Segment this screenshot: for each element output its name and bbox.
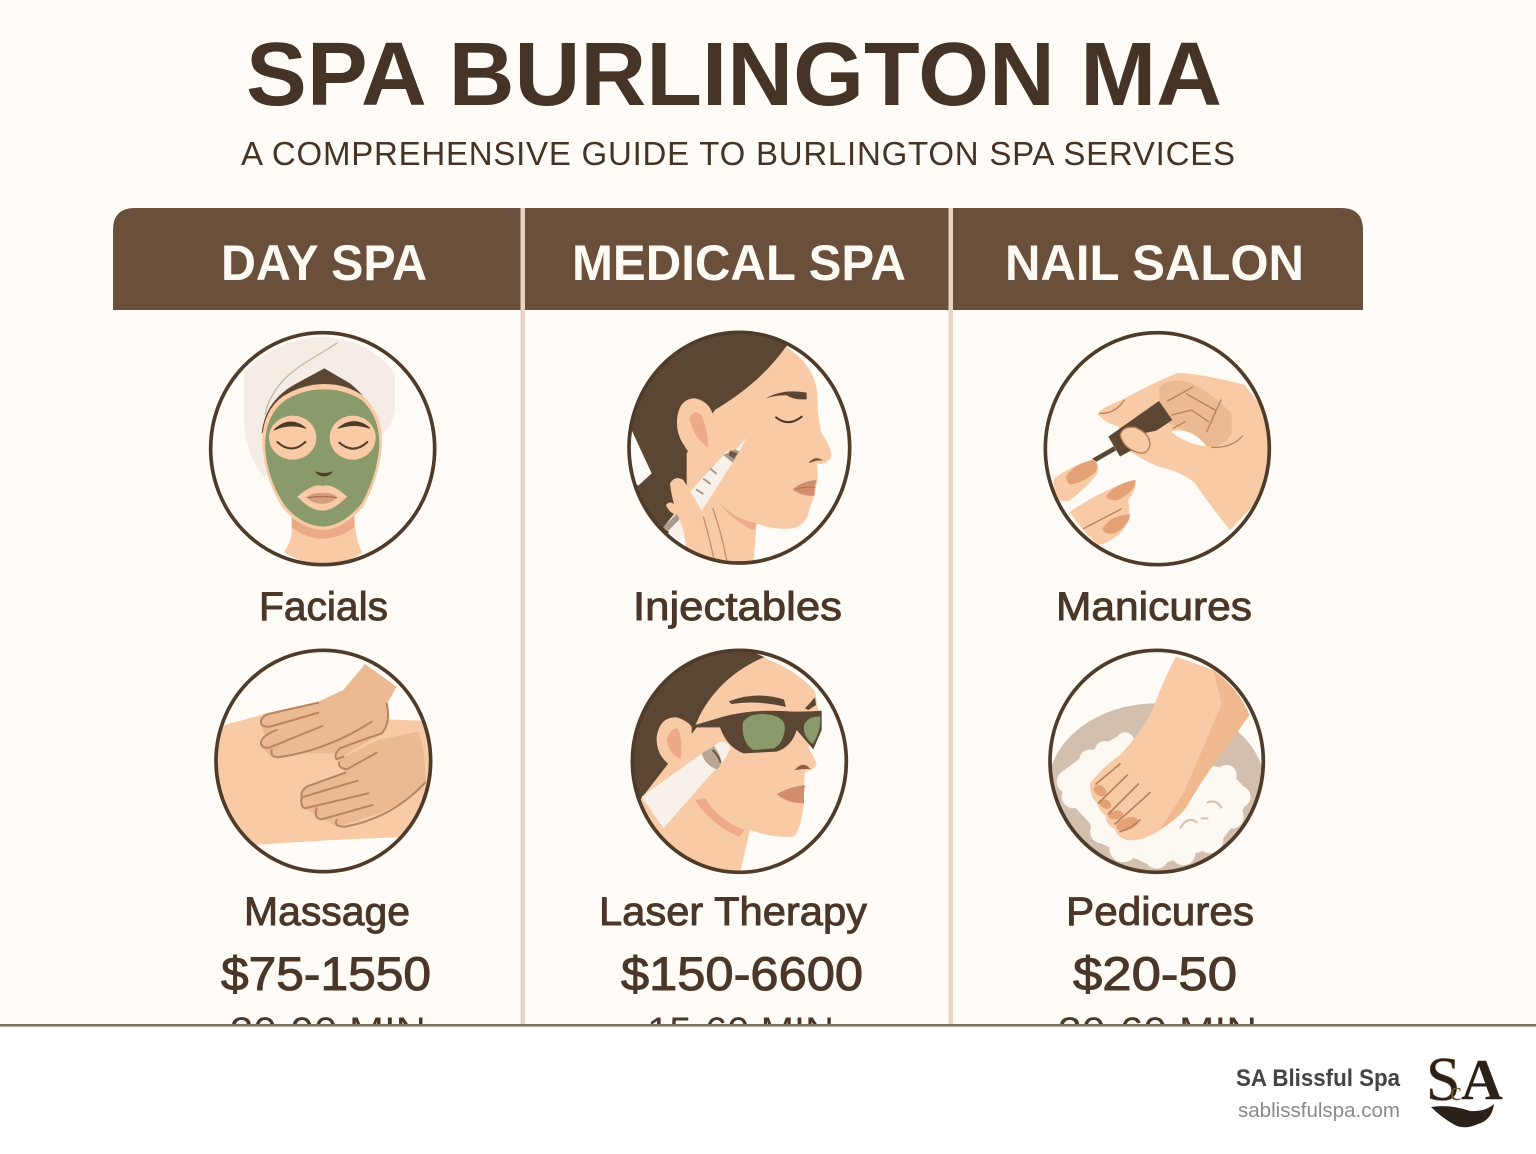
logo: SA with feather: A xyxy=(1461,1047,1503,1112)
icon: laser therapy xyxy=(627,643,846,873)
label: manicures: Manicures xyxy=(1056,585,1252,629)
label: pedicures: Pedicures xyxy=(1066,890,1254,934)
label: laser therapy: Laser Therapy xyxy=(599,890,867,934)
icon: massage xyxy=(205,650,438,872)
logo: SA with feather: c xyxy=(1450,1077,1462,1106)
price: day spa: $75-1550 xyxy=(221,947,431,1000)
label: injectables: Injectables xyxy=(633,585,842,629)
footer url: sablissfulspa.com xyxy=(1238,1100,1400,1122)
label: facials: Facials xyxy=(259,585,388,629)
icon: injectable xyxy=(623,327,850,565)
durations, clipped by the footer: 30-90 MIN xyxy=(230,1010,426,1054)
header: nail salon: NAIL SALON xyxy=(1005,235,1304,291)
title: SPA BURLINGTON MA xyxy=(246,25,1222,125)
icon: pedicure xyxy=(1048,650,1265,873)
durations, clipped by the footer: 30-60 MIN xyxy=(1058,1010,1257,1054)
logo: SA with feather xyxy=(1426,1046,1503,1127)
logo: SA with feather: S xyxy=(1426,1046,1460,1114)
header: day spa: DAY SPA xyxy=(221,235,427,291)
label: massage: Massage xyxy=(244,890,410,934)
icon: manicure xyxy=(1045,333,1272,565)
header: medical spa: MEDICAL SPA xyxy=(572,235,906,291)
durations, clipped by the footer xyxy=(232,1017,1254,1024)
table header bar xyxy=(113,208,1363,310)
price: medical spa: $150-6600 xyxy=(621,947,863,1000)
footer band xyxy=(0,1024,1536,1154)
subtitle: A COMPREHENSIVE GUIDE TO BURLINGTON SPA SERVICES xyxy=(241,135,1235,172)
durations, clipped by the footer: 15-60 MIN xyxy=(647,1010,834,1054)
price: nail salon: $20-50 xyxy=(1073,947,1237,1000)
footer brand name: SA Blissful Spa xyxy=(1236,1065,1401,1092)
icon: facial mask xyxy=(211,333,435,565)
